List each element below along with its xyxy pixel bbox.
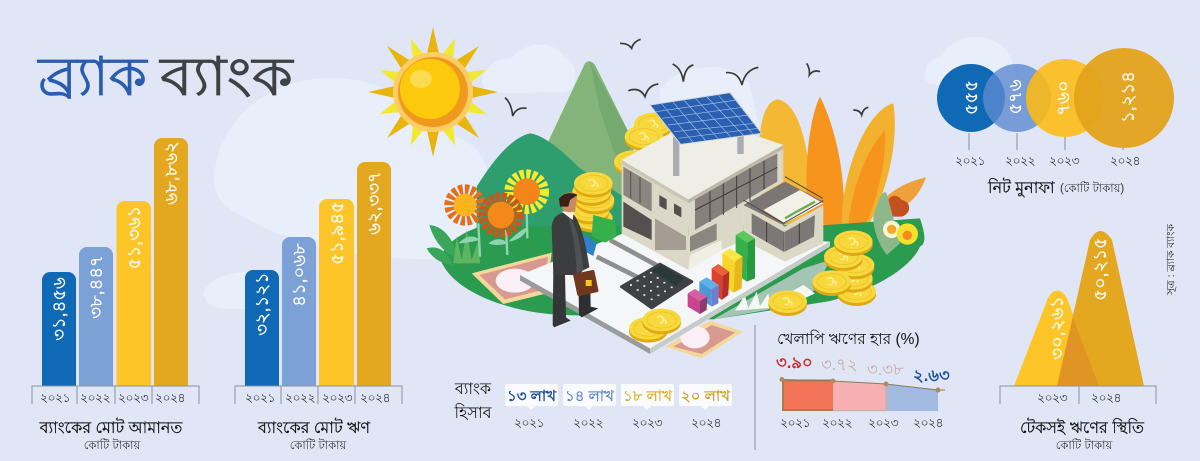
title: ব্যাংক xyxy=(159,47,294,107)
bar 2022 loans: ৪১,০৬৮ xyxy=(289,243,309,307)
bar 2023 deposits xyxy=(116,201,151,386)
bar 2021 loans xyxy=(245,270,279,386)
heading: tech loans: টেকসই ঋণের স্থিতি xyxy=(1020,418,1145,437)
island ground xyxy=(441,218,924,319)
heading: bank accounts: হিসাব xyxy=(453,403,493,422)
accounts 2021: ১৩ লাখ xyxy=(507,388,557,405)
accounts 2023: ১৮ লাখ xyxy=(623,388,673,405)
birds xyxy=(505,39,868,116)
white plot xyxy=(520,233,830,354)
default rate years: ২০২২ xyxy=(822,416,853,430)
default rate years: ২০২৩ xyxy=(868,416,899,430)
axis loans: ২০২৪ xyxy=(360,391,390,405)
calculator xyxy=(621,264,692,308)
bar 2022 loans xyxy=(282,237,316,386)
axis loans: ২০২২ xyxy=(285,391,316,405)
left plants xyxy=(427,225,480,265)
default rate values: ৩.৯০ xyxy=(776,354,813,372)
default rate years: ২০২৪ xyxy=(913,416,943,430)
axis deposits: ২০২৩ xyxy=(118,391,149,405)
heading: default rate: খেলাপি ঋণের হার (%) xyxy=(777,329,920,348)
default rate values: ৩.৩৮ xyxy=(867,361,904,379)
peak values xyxy=(1047,237,1110,360)
heading: net profit: নিট মুনাফা xyxy=(987,178,1055,197)
axis tech: ২০২৩ xyxy=(1037,391,1068,405)
banknote right xyxy=(665,321,743,358)
peak 2023 xyxy=(1014,290,1099,386)
vertical divider xyxy=(754,325,756,450)
default rate values: ২.৬৩ xyxy=(913,367,950,385)
bar 2024 loans: ৬২,৩৩৭ xyxy=(364,171,384,235)
heading: bank accounts xyxy=(453,381,493,422)
axis tech: ২০২৪ xyxy=(1091,391,1121,405)
accounts 2021 xyxy=(505,384,558,430)
year labels profit: ২০২১ xyxy=(955,154,985,168)
accounts 2021: ২০২১ xyxy=(514,416,544,430)
axis loans: ২০২৩ xyxy=(322,391,353,405)
solar panel xyxy=(650,93,762,144)
bar 2021 deposits: ৩১,৪৫৬ xyxy=(49,277,69,341)
circle 2024: ১,২১৪ xyxy=(1118,71,1138,123)
coin stack right xyxy=(812,230,876,306)
heading: total deposits: কোটি টাকায় xyxy=(84,438,141,452)
heading: total loans: কোটি টাকায় xyxy=(290,438,347,452)
bar 2023 loans: ৫১,৯৪৫ xyxy=(327,201,347,265)
man in suit xyxy=(552,192,599,327)
heading: tech loans xyxy=(1020,418,1145,452)
mountains xyxy=(477,61,633,243)
year labels profit: ২০২৪ xyxy=(1110,154,1140,168)
heading: total loans: ব্যাংকের মোট ঋণ xyxy=(257,418,370,437)
peak 2024 xyxy=(1057,231,1144,386)
accounts 2023: ২০২৩ xyxy=(632,416,663,430)
year labels profit: ২০২২ xyxy=(1005,154,1036,168)
default rate years: ২০২১ xyxy=(780,416,810,430)
area chart: default rate xyxy=(776,354,950,430)
illustration: house, man and coins xyxy=(427,39,926,358)
source note: সূত্র : ব্র্যাক ব্যাংক xyxy=(1165,223,1177,296)
heading: total deposits xyxy=(39,418,183,452)
accounts 2022 xyxy=(563,384,616,430)
heading: bank accounts: ব্যাংক xyxy=(454,381,492,398)
heading: net profit xyxy=(987,178,1124,197)
coin stacks behind house xyxy=(614,113,673,176)
title: ব্র্যাক xyxy=(37,47,148,107)
heading: total deposits: ব্যাংকের মোট আমানত xyxy=(39,418,183,437)
circle 2021 xyxy=(937,64,1005,132)
axis deposits: ২০২২ xyxy=(80,391,111,405)
peak values: ৫০,২১৫ xyxy=(1090,237,1110,301)
coin stack left xyxy=(571,172,614,233)
bar 2022 deposits xyxy=(79,247,113,386)
circle 2022 xyxy=(983,64,1051,132)
circle 2023: ৭৬০ xyxy=(1053,80,1073,116)
bar chart: total deposits xyxy=(32,138,199,405)
accounts 2024: ২০২৪ xyxy=(691,416,721,430)
right flowers xyxy=(873,192,918,255)
axis loans: ২০২১ xyxy=(245,391,275,405)
circle 2021: ৫৫৫ xyxy=(961,80,981,115)
bar 2021 deposits xyxy=(42,272,76,386)
orange leaves xyxy=(759,97,926,233)
clouds xyxy=(204,37,1012,309)
bar chart: total loans xyxy=(235,162,402,405)
title xyxy=(37,47,294,107)
icon: sun xyxy=(368,27,498,157)
year labels profit: ২০২৩ xyxy=(1049,154,1080,168)
accounts 2022: ২০২২ xyxy=(573,416,604,430)
default rate years xyxy=(780,416,943,430)
circle 2024 xyxy=(1074,48,1174,148)
axis loans xyxy=(235,386,402,405)
axis tech xyxy=(1000,386,1156,405)
house xyxy=(622,130,823,270)
shopping bags xyxy=(583,215,617,256)
bubble chart: net profit xyxy=(937,48,1174,168)
chart blocks xyxy=(688,231,755,314)
default rate values xyxy=(776,354,950,385)
heading: total loans xyxy=(257,418,370,452)
default rate values: ৩.৭২ xyxy=(821,356,858,374)
bar 2021 loans: ৩২,১২১ xyxy=(252,272,272,336)
bar 2023 loans xyxy=(319,199,354,386)
peak values: ৩০,২৬১ xyxy=(1047,296,1067,360)
banknote left xyxy=(472,253,552,304)
bar 2022 deposits: ৩৮,৪৪৭ xyxy=(86,255,106,319)
accounts 2024 xyxy=(679,384,732,430)
accounts 2024: ২০ লাখ xyxy=(681,388,731,405)
accounts 2022: ১৪ লাখ xyxy=(565,388,615,405)
heading: tech loans: কোটি টাকায় xyxy=(1056,438,1113,452)
bar 2023 deposits: ৫১,৩৬১ xyxy=(124,206,144,269)
circle 2023 xyxy=(1026,59,1104,137)
triangle chart: tech loans xyxy=(1000,231,1156,405)
axis deposits: ২০২১ xyxy=(40,391,70,405)
bar 2024 deposits xyxy=(154,138,188,386)
heading: net profit: (কোটি টাকায়) xyxy=(1060,181,1124,195)
bar 2024 loans xyxy=(357,162,391,386)
sunflowers xyxy=(450,175,543,257)
axis deposits: ২০২৪ xyxy=(155,391,185,405)
axis deposits xyxy=(32,386,199,405)
single coins xyxy=(629,290,807,343)
year labels profit xyxy=(955,133,1140,168)
circle 2022: ৫৭৬ xyxy=(1005,79,1025,115)
bar 2024 deposits: ৬৮,৮৬২ xyxy=(161,141,181,205)
accounts 2023 xyxy=(621,384,674,430)
grass patch xyxy=(713,260,830,319)
